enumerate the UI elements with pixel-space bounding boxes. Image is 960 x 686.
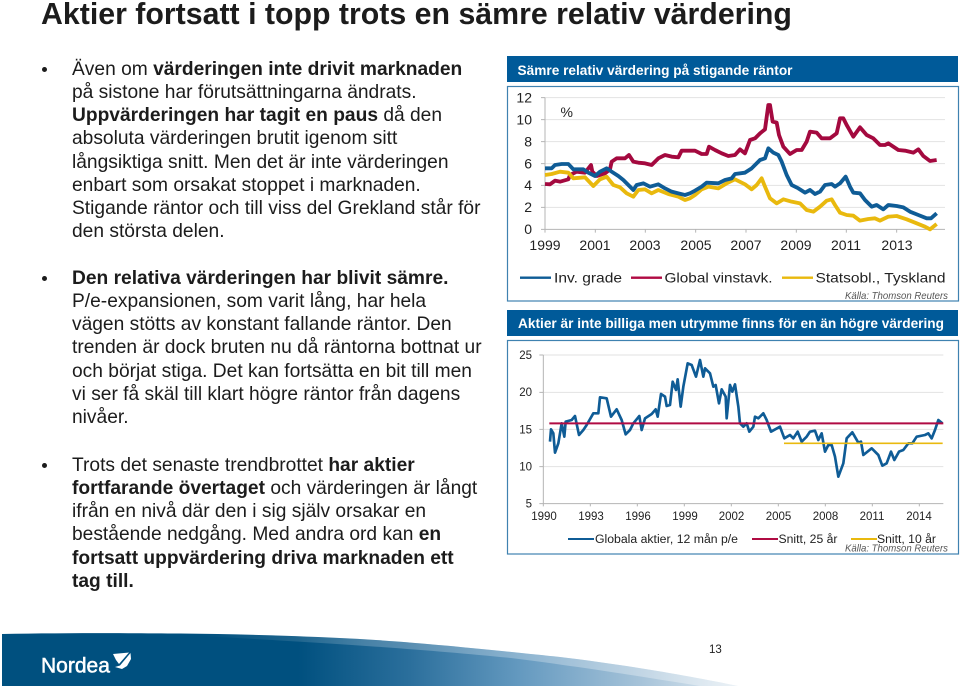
text block: second bullet: trenden är dock bruten nu då räntorna bottnat ur — [72, 337, 482, 358]
panel: top chart — [507, 56, 958, 302]
chart frame: bottom chart — [508, 340, 958, 554]
legend: top chart — [520, 270, 946, 286]
unit label: % — [560, 104, 573, 120]
text block: third bullet: fortfarande övertaget och värderingen är långt — [72, 478, 477, 499]
x axis labels: 2011 — [831, 237, 861, 253]
text block: third bullet: Trots det senaste trendbrottet har aktier — [72, 455, 415, 476]
y axis labels: 15 — [519, 424, 532, 436]
x axis labels: 1996 — [625, 511, 651, 523]
text block: second bullet: och börjat stiga. Det kan fortsätta en bit till men — [72, 361, 472, 382]
bullet dot 3 — [42, 463, 47, 468]
heading: top chart — [507, 56, 958, 82]
heading: bottom chart: Aktier är inte billiga men utrymme finns för en än högre värdering — [518, 316, 944, 331]
x axis labels: 2014 — [906, 511, 932, 523]
y axis labels: 20 — [519, 387, 532, 399]
heading: bottom chart — [507, 310, 958, 336]
x axis labels: 2009 — [780, 237, 812, 253]
page number: 13 — [709, 644, 722, 656]
text block: third bullet: ifrån en nivå där den i sig själv orsakar en — [72, 501, 426, 522]
text block: third bullet — [72, 455, 478, 592]
y axis labels: 5 — [526, 498, 532, 510]
x axis labels: 1999 — [529, 237, 561, 253]
legend: bottom chart: Globala aktier, 12 mån p/e — [595, 534, 738, 546]
x axis labels — [531, 511, 932, 523]
y axis labels: 2 — [524, 199, 532, 215]
x axis labels: 2007 — [730, 237, 762, 253]
series: Statsobligationer Tyskland — [545, 172, 937, 229]
x axis labels — [529, 237, 913, 253]
x axis labels: 1999 — [672, 511, 698, 523]
text block: second bullet: P/e-expansionen, som varit lång, har hela — [72, 291, 426, 312]
x axis labels: 2001 — [579, 237, 611, 253]
text block: first bullet — [72, 58, 480, 242]
legend: bottom chart — [568, 534, 936, 546]
text block: second bullet: Den relativa värderingen har blivit sämre. — [72, 268, 448, 289]
x axis labels: 2008 — [813, 511, 838, 523]
text block: second bullet — [72, 268, 482, 428]
text block: third bullet: tag till. — [72, 571, 134, 592]
text block: first bullet: på sistone har förutsättningarna ändrats. — [72, 82, 417, 103]
x axis labels: 1993 — [578, 511, 604, 523]
text block: third bullet: fortsatt uppvärdering driva marknaden ett — [72, 548, 454, 569]
x axis labels: 2002 — [719, 511, 744, 523]
heading: top chart: Sämre relativ värdering på stigande räntor — [518, 63, 793, 78]
series: 25 year average — [549, 420, 943, 426]
footer banner — [2, 633, 738, 686]
text block: second bullet: nivåer. — [72, 407, 129, 428]
line chart: yields — [516, 90, 945, 253]
legend: top chart: Statsobl., Tyskland — [816, 270, 946, 286]
text block: first bullet: långsiktiga snitt. Men det är inte värderingen — [72, 152, 448, 173]
series: Investment grade — [545, 148, 937, 218]
text block: first bullet: absoluta värderingen brutit igenom sitt — [72, 128, 397, 149]
text block: first bullet: enbart som orsakat stoppet i marknaden. — [72, 175, 421, 196]
series: 10 year average — [784, 441, 943, 446]
y axis labels: 8 — [524, 134, 532, 150]
y axis labels: 10 — [516, 112, 532, 128]
x axis labels: 2005 — [766, 511, 791, 523]
x axis labels: 2011 — [860, 511, 884, 523]
source note: bottom chart: Källa: Thomson Reuters — [845, 544, 948, 554]
text block: first bullet: Stigande räntor och till viss del Grekland står för — [72, 198, 480, 219]
y axis labels: 4 — [524, 177, 532, 193]
x axis labels: 2013 — [881, 237, 913, 253]
y axis labels — [516, 90, 532, 237]
series: Global vinstavkastning — [545, 105, 937, 184]
text block: first bullet: Även om värderingen inte drivit marknaden — [72, 59, 462, 80]
legend: bottom chart: Snitt, 25 år — [778, 534, 838, 546]
text block: second bullet: vägen stötts av konstant fallande räntor. Den — [72, 314, 452, 335]
icon: sail — [113, 652, 131, 669]
text block: first bullet: den största delen. — [72, 221, 225, 242]
y axis labels — [519, 350, 532, 510]
line chart: p/e — [519, 350, 943, 523]
x axis labels: 2003 — [629, 237, 661, 253]
text block: third bullet: bestående nedgång. Med andra ord kan en — [72, 524, 441, 545]
legend: bottom chart: Snitt, 10 år — [877, 534, 936, 546]
x axis labels: 1990 — [531, 511, 557, 523]
logo: Nordea: Nordea — [41, 654, 110, 678]
y axis labels: 25 — [519, 350, 532, 362]
bullet dot 2 — [42, 276, 47, 281]
legend: top chart: Inv. grade — [554, 270, 622, 286]
y axis labels: 6 — [524, 156, 532, 172]
y axis labels: 0 — [524, 221, 532, 237]
legend: top chart: Global vinstavk. — [664, 270, 772, 286]
y axis labels: 12 — [516, 90, 532, 106]
text block: second bullet: vi ser få skäl till klart högre räntor från dagens — [72, 384, 460, 405]
panel: bottom chart — [507, 310, 958, 554]
text block: first bullet: Uppvärderingen har tagit en paus då den — [72, 105, 442, 126]
bullet dot 1 — [42, 67, 47, 72]
x axis labels: 2005 — [680, 237, 712, 253]
source note: top chart: Källa: Thomson Reuters — [845, 291, 948, 302]
y axis labels: 10 — [519, 462, 532, 474]
series: 12 month p/e — [550, 360, 942, 477]
chart frame: top chart — [508, 86, 958, 301]
